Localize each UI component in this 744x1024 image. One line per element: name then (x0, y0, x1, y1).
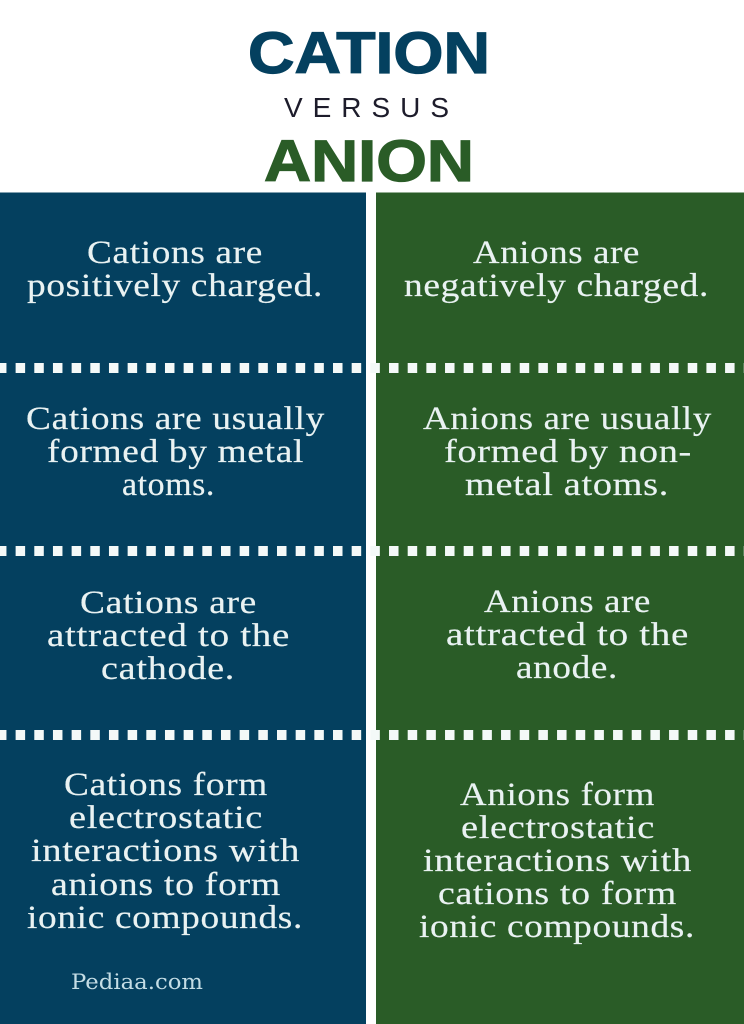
row: anion charge (404, 235, 709, 304)
row: cation formation: Cations are usually (26, 401, 325, 437)
row: anion charge: negatively charged. (404, 268, 709, 304)
panel: cation column (0, 192, 366, 1024)
row: anion attraction: anode. (516, 650, 618, 686)
row: cation interactions: interactions with (31, 833, 300, 869)
heading: cation: CATION (248, 21, 490, 86)
row: anion attraction: attracted to the (446, 617, 689, 653)
row: cation interactions: Cations form (64, 767, 268, 803)
row: anion interactions: cations to form (438, 876, 677, 912)
row: anion formation (423, 401, 712, 503)
title: cation versus anion (248, 21, 490, 194)
row: cation interactions: ionic compounds. (27, 900, 303, 936)
watermark: Pediaa.com: Pediaa.com (71, 970, 203, 994)
row: cation interactions: electrostatic (69, 800, 263, 836)
row: anion formation: Anions are usually (423, 401, 712, 437)
row: cation interactions: anions to form (51, 867, 281, 903)
row: anion formation: metal atoms. (465, 467, 669, 503)
row: cation attraction: cathode. (101, 651, 235, 687)
row: anion interactions: electrostatic (461, 810, 655, 846)
row: cation formation: formed by metal (47, 434, 304, 470)
heading: versus: VERSUS (284, 92, 449, 123)
row: anion charge: Anions are (473, 235, 640, 271)
panel: anion column (376, 192, 744, 1024)
row: anion attraction (446, 584, 689, 686)
row: anion formation: formed by non- (444, 434, 692, 470)
row: cation interactions (27, 767, 303, 936)
row: cation attraction (47, 585, 290, 687)
row: cation attraction: Cations are (80, 585, 257, 621)
row: anion interactions: ionic compounds. (419, 909, 695, 945)
row: anion interactions: interactions with (423, 843, 692, 879)
row: cation charge (27, 235, 323, 304)
row: anion interactions: Anions form (460, 777, 655, 813)
row: cation formation (26, 401, 325, 503)
row: anion interactions (419, 777, 695, 945)
row: anion attraction: Anions are (484, 584, 651, 620)
row: cation charge: Cations are (87, 235, 263, 271)
row: cation attraction: attracted to the (47, 618, 290, 654)
row: cation formation: atoms. (122, 467, 215, 503)
row: cation charge: positively charged. (27, 268, 323, 304)
heading: anion: ANION (264, 129, 474, 194)
